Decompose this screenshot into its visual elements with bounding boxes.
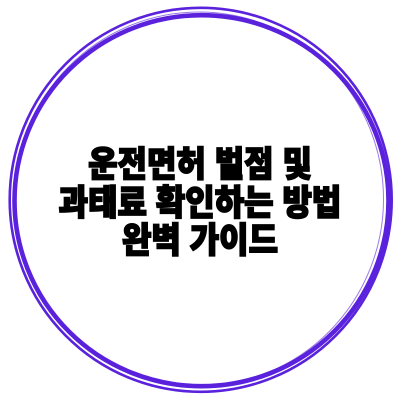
title: 과태료 확인하는 방법 xyxy=(59,183,341,222)
title xyxy=(58,145,341,260)
title: 완벽 가이드 xyxy=(122,221,278,260)
title: 운전면허 벌점 및 xyxy=(88,145,312,184)
